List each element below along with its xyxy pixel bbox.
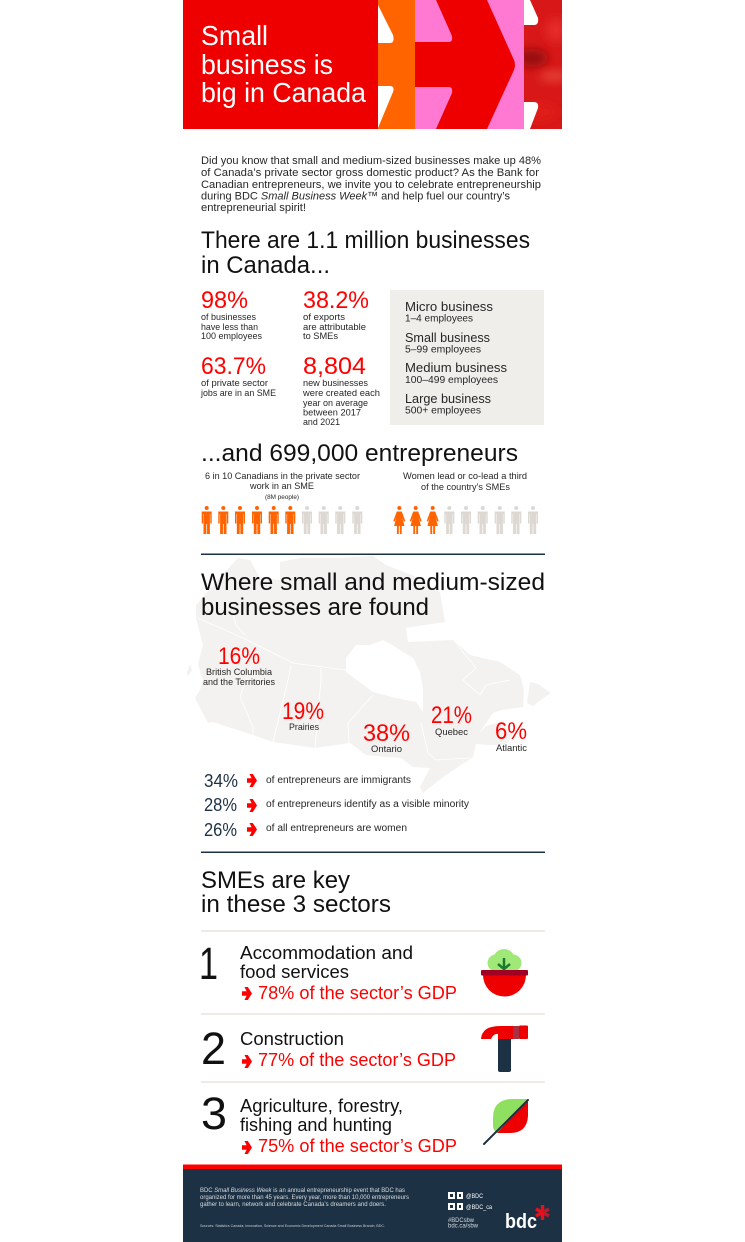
pictogram: 6 in 10 [202,506,362,534]
region: Prairies: Prairies [289,722,319,733]
stat row: immigrants: of entrepreneurs are immigrants [266,775,411,786]
stat: 8,804 [302,353,380,428]
region: Ontario: Ontario [371,744,402,755]
region: Atlantic: 6% [495,718,527,745]
sector 1: 1 [199,938,218,989]
stat: 98%: of businesses [201,312,256,323]
footer text: BDC Small Business Week is an annual entrepreneurship event that BDC has [200,1188,405,1194]
stat: 8,804: between 2017 [303,408,361,418]
stat: 8,804: were created each [302,388,380,399]
sector 1: 78% of the sector’s GDP [258,982,457,1003]
title [201,20,367,108]
sources: Sources: Statistics Canada; Innovation, Science and Economic Development Canada Small Business Branch; BDC. [200,1224,385,1228]
region: British Columbia: British Columbia [206,667,273,678]
logo: bdc: bdc [505,1211,537,1233]
footer text: gather to learn, network and celebrate Canada’s dreamers and doers. [200,1202,386,1208]
social handles: @BDC_ca [466,1205,493,1211]
heading: businesses: in Canada... [201,252,330,279]
stat: 38.2%: to SMEs [303,331,338,342]
stat row: visible minority [204,795,469,815]
social handles: @BDC [466,1194,484,1200]
sector 1: food services [240,962,349,982]
heading: sectors [201,867,391,918]
footer [183,1164,562,1242]
sector 1 [199,938,528,1003]
intro paragraph: Canadian entrepreneurs, we invite you to celebrate entrepreneurship [201,179,541,191]
stat: 63.7%: of private sector [201,378,268,389]
panel: business sizes: 1–4 employees [405,314,473,324]
region: Prairies [282,698,324,733]
panel: business sizes: Large business [405,391,491,406]
panel: business sizes: 5–99 employees [405,344,481,356]
caption: women lead: of the country’s SMEs [421,482,510,493]
intro paragraph: Did you know that small and medium-sized businesses make up 48% [201,155,541,167]
panel: business sizes: Small business [405,330,490,345]
stat: 63.7%: 63.7% [201,353,266,380]
stat row: women [204,820,407,840]
sector 3 [201,1088,528,1156]
Newfoundland [527,682,551,706]
intro paragraph: of Canada’s private sector gross domestic product? As the Bank for [201,167,539,179]
social handles [448,1192,493,1230]
stat: 63.7% [200,353,276,399]
banner red arrow [415,0,515,129]
sector 2: 2 [201,1023,226,1074]
banner photo strip [524,0,562,129]
region: Quebec: 21% [431,702,472,729]
banner white arrow notches [378,0,538,129]
region: British Columbia [203,643,275,688]
icon: salad bowl [481,949,528,997]
panel: business sizes: 500+ employees [405,406,481,416]
stat: 63.7%: jobs are in an SME [200,388,276,399]
region: British Columbia: 16% [218,643,260,670]
stat row: visible minority: of entrepreneurs identify as a visible minority [266,799,469,810]
footer text: organized for more than 45 years. Every year, more than 10,000 entrepreneurs [200,1195,409,1201]
region: Atlantic: Atlantic [496,743,527,754]
stat row: women: of all entrepreneurs are women [266,823,407,834]
footer text [200,1188,409,1208]
stat row: immigrants [204,771,411,791]
caption: 6 in 10: (8M people) [265,495,299,501]
pictogram: women third [393,506,538,534]
heading: entrepreneurs: ...and 699,000 entrepreneurs [201,440,518,467]
title: Small [201,20,268,51]
region: Ontario: 38% [363,720,410,747]
region: Quebec: Quebec [435,727,468,738]
stat: 38.2%: 38.2% [303,287,369,314]
title: big in Canada [201,77,367,108]
social handles: bdc.ca/sbw [448,1224,479,1230]
heading: sectors: SMEs are key [201,867,351,894]
panel: business sizes [390,290,544,425]
stat: 8,804: year on average [303,398,368,409]
caption: 6 in 10: 6 in 10 Canadians in the private sector [205,471,360,482]
stat: 98%: 98% [201,287,248,314]
sector 1: Accommodation and [240,943,413,963]
stat: 38.2% [303,287,369,342]
heading: businesses: There are 1.1 million businesses [201,227,530,254]
stat: 98%: 100 employees [201,331,262,342]
caption: 6 in 10: work in an SME [249,481,314,492]
sector 3: Agriculture, forestry, [240,1096,403,1116]
icon: leaf [484,1099,528,1144]
banner [183,0,568,129]
sector 2: 77% of the sector’s GDP [258,1049,456,1070]
region: Prairies: 19% [282,698,324,725]
region: Quebec [431,702,472,738]
caption: women lead: Women lead or co-lead a third [403,471,527,482]
sector 3: 3 [201,1088,227,1139]
stat row: visible minority: 28% [204,795,237,815]
heading: businesses [201,227,530,279]
title: business is [201,49,333,80]
stat: 38.2%: of exports [303,312,345,323]
heading: where: Where small and medium-sized [201,569,545,596]
intro paragraph: entrepreneurial spirit! [201,202,306,214]
icon: hammer [481,1026,528,1072]
intro paragraph: during BDC Small Business Week™ and help fuel our country’s [201,190,510,202]
panel: business sizes: 100–499 employees [405,375,498,386]
region: British Columbia: and the Territories [203,677,275,688]
sector 2: Construction [240,1029,344,1049]
heading: where [201,569,545,621]
stat: 8,804: new businesses [303,378,368,389]
caption: women lead [403,471,527,493]
heading: where: businesses are found [201,594,429,621]
intro paragraph [201,155,541,214]
social handles: #BDCsbw [448,1218,475,1224]
caption: 6 in 10 [205,471,360,501]
panel: business sizes: Micro business [405,299,494,314]
stat row: immigrants: 34% [204,771,238,791]
stat: 8,804: 8,804 [303,353,366,380]
stat: 38.2%: are attributable [303,322,366,333]
sector 3: fishing and hunting [240,1115,392,1135]
heading: sectors: in these 3 sectors [201,891,391,918]
logo: bdc [505,1205,549,1233]
stat row: women: 26% [204,820,237,840]
sector 3: 75% of the sector’s GDP [258,1135,457,1156]
sector 2 [201,1023,528,1074]
stat: 98%: have less than [201,322,258,333]
stat: 98% [201,287,262,342]
panel: business sizes: Medium business [405,360,508,375]
Hudson Bay [346,640,423,712]
stat: 8,804: and 2021 [303,417,340,428]
map of Canada [187,556,551,793]
